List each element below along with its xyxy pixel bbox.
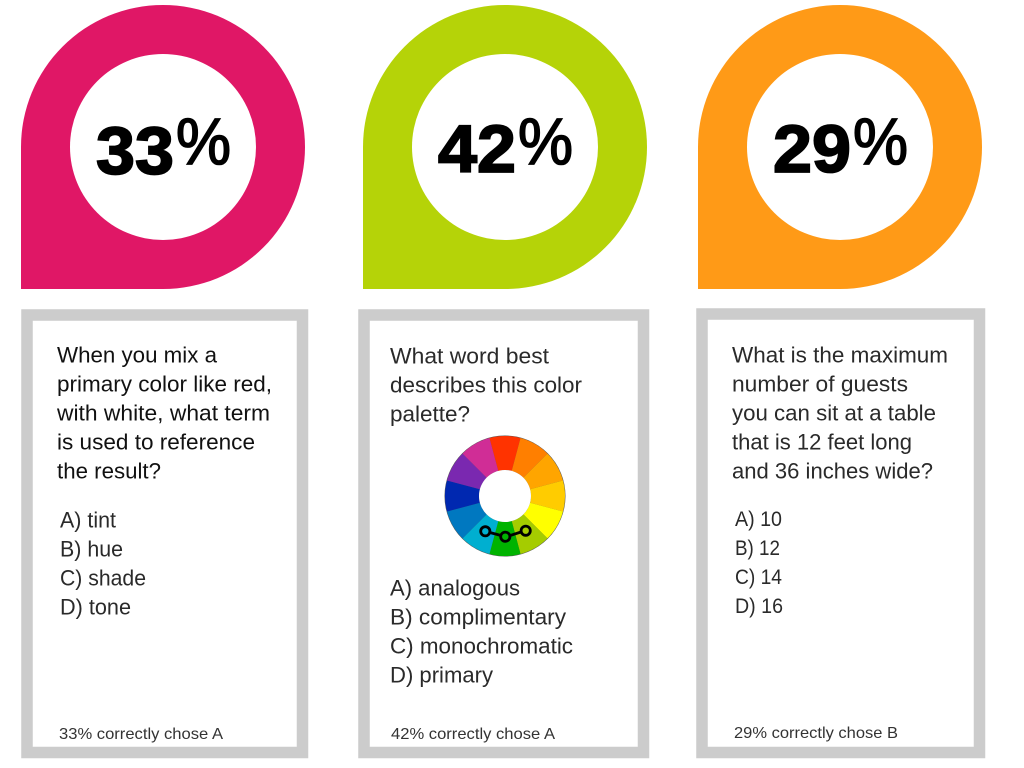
answer options 1: D) tone [60,594,131,620]
analogous connector markers [481,526,530,541]
question text 1: When you mix a [57,342,218,368]
answer options 1 [60,508,146,620]
question text 1 [56,342,272,484]
answer options 3: C) 14 [735,566,782,589]
pin badge: 42% [363,5,647,289]
answer options 3: B) 12 [735,537,780,560]
answer options 2: D) primary [390,662,493,688]
question text 2: describes this color [390,372,582,398]
answer options 3: A) 10 [735,508,782,531]
stat: 29% [773,104,908,187]
answer options 2: C) monochromatic [390,634,573,658]
question text 3: you can sit at a table [732,400,936,426]
question text 3: and 36 inches wide? [732,458,933,484]
stat: 42%: 42 [438,112,516,187]
answer options 1: B) hue [60,536,123,562]
pin badge: 29% [698,5,982,289]
panel: question 2 [364,315,644,752]
panel: question 1 [27,315,302,752]
stat: 42% [438,104,573,187]
question text 3: that is 12 feet long [732,430,912,454]
result note 2: 42% correctly chose A [391,726,555,743]
stat: 29%: % [853,104,908,178]
question text 1: is used to reference [57,430,255,454]
answer options 2 [390,576,573,688]
answer options 3: D) 16 [735,595,783,618]
panel: question 3 [702,314,980,752]
question text 2: What word best [390,344,549,368]
answer options 2: A) analogous [390,576,520,600]
result note 1: 33% correctly chose A [59,726,223,743]
question text 3: number of guests [732,372,908,396]
result note 3: 29% correctly chose B [734,725,898,742]
question text 1: the result? [57,458,161,484]
stat: 33% [96,104,231,189]
question text 1: primary color like red, [57,372,272,396]
stat: 33%: % [176,104,231,178]
question text 1: with white, what term [56,400,270,426]
answer options 3 [735,508,783,618]
question text 3: What is the maximum [732,342,948,368]
question text 3 [732,342,948,484]
question text 2: palette? [390,402,470,426]
answer options 1: A) tint [60,508,116,532]
stat: 42%: % [518,104,573,178]
question text 2 [390,344,582,426]
stat: 33%: 33 [96,114,174,189]
color wheel [444,436,566,556]
pin badge: 33% [21,5,305,289]
answer options 2: B) complimentary [390,604,566,630]
stat: 29%: 29 [773,112,851,187]
answer options 1: C) shade [60,566,146,590]
